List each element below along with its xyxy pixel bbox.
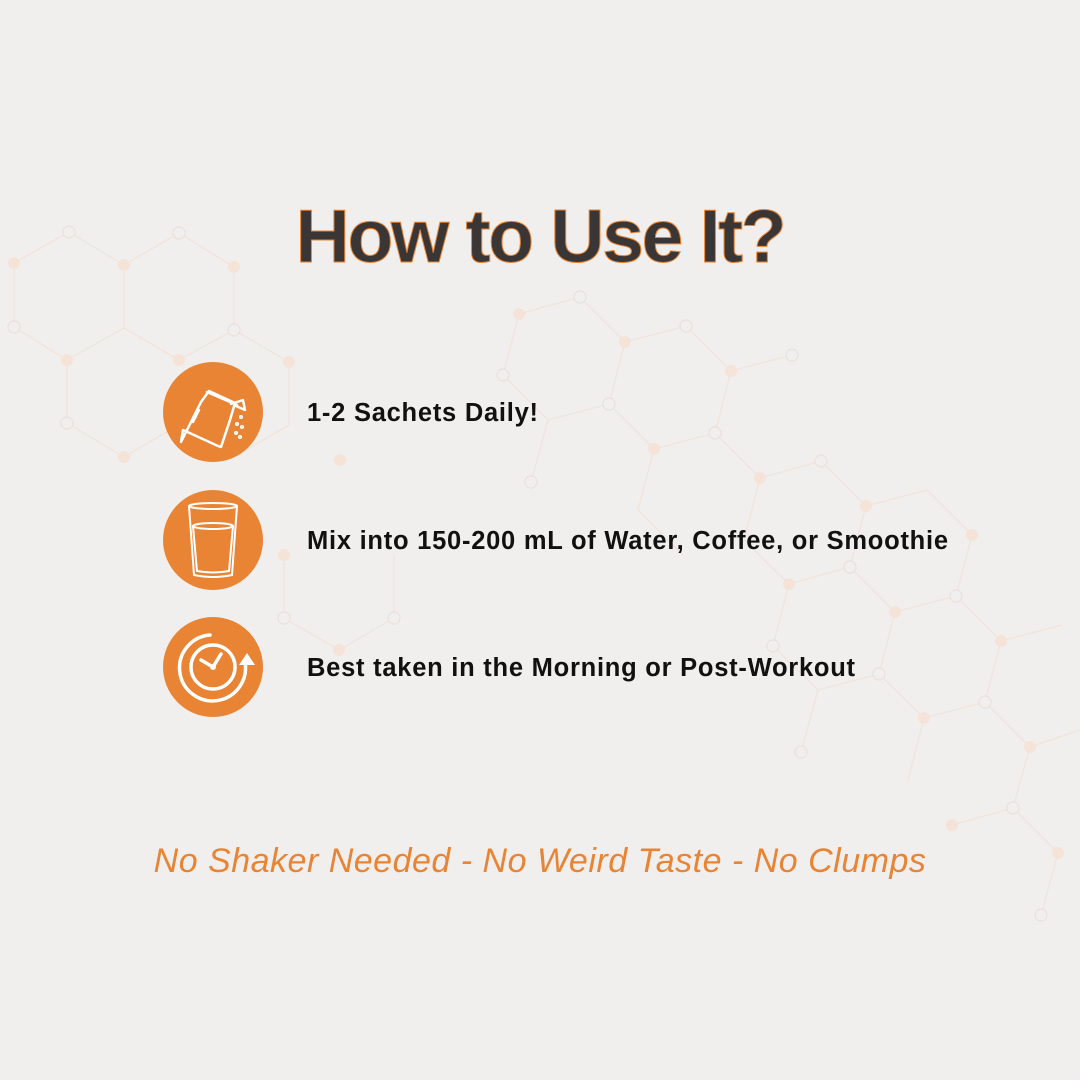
- icon: clock: [163, 617, 263, 717]
- title: How to Use It?: [296, 194, 784, 278]
- text: step 2: Mix into 150-200 mL of Water, Coffee, or Smoothie: [307, 527, 949, 555]
- icon: sachet: [163, 362, 263, 462]
- icon: glass: [163, 490, 263, 590]
- tagline: No Shaker Needed - No Weird Taste - No Clumps: [154, 842, 926, 880]
- text: step 1: 1-2 Sachets Daily!: [307, 399, 539, 427]
- text: step 3: Best taken in the Morning or Post-Workout: [307, 654, 856, 682]
